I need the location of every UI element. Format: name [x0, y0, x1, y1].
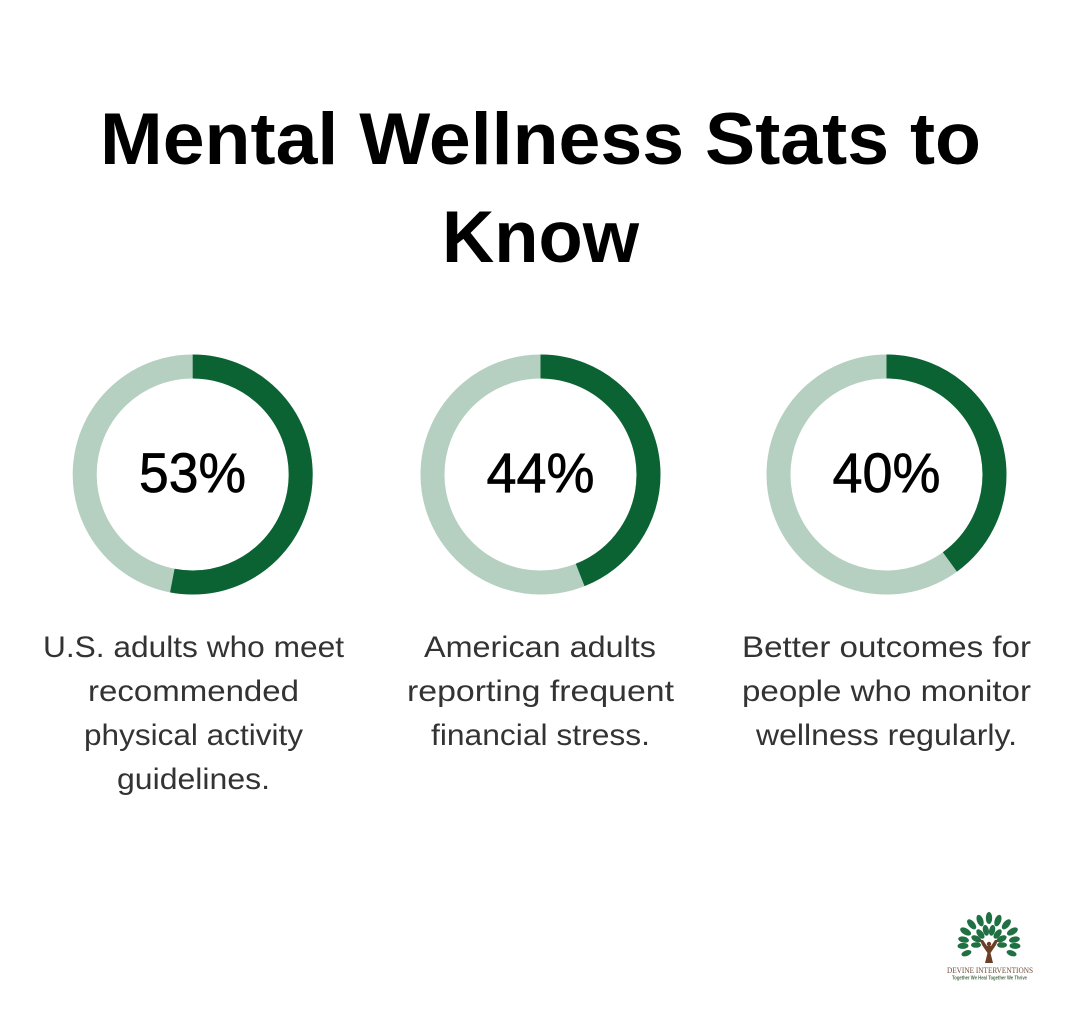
description: financial stress: American adults: [424, 631, 656, 664]
description: wellness monitoring: [742, 631, 1031, 752]
description: physical activity: guidelines.: [117, 763, 270, 796]
description: physical activity: [43, 631, 345, 796]
description: financial stress: reporting frequent: [407, 675, 675, 708]
description: financial stress: financial stress.: [431, 719, 650, 752]
title: Know: [442, 197, 639, 278]
description: wellness monitoring: wellness regularly.: [755, 719, 1017, 752]
title: Mental Wellness Stats to: [100, 99, 981, 180]
value: 53%: 53%: [139, 441, 246, 504]
panel: 40% stat: [742, 366, 1031, 752]
description: physical activity: physical activity: [84, 719, 303, 752]
donut chart: 44%: [432, 366, 648, 582]
donut chart: 53%: [85, 366, 301, 582]
icon: tree: [957, 912, 1021, 963]
title: [100, 99, 981, 278]
description: physical activity: U.S. adults who meet: [43, 631, 345, 664]
description: financial stress: [407, 631, 675, 752]
value: 44%: 44%: [486, 441, 594, 504]
value: 40%: 40%: [832, 441, 940, 504]
logo name: DEVINE INTERVENTIONS: [947, 966, 1033, 975]
description: wellness monitoring: people who monitor: [742, 675, 1031, 708]
description: physical activity: recommended: [88, 675, 299, 708]
logo: Devine Interventions: [947, 912, 1033, 982]
logo tagline: Together We Heal Together We Thrive: [952, 976, 1027, 982]
description: wellness monitoring: Better outcomes for: [742, 631, 1031, 664]
panel: 44% stat: [407, 366, 675, 752]
donut chart: 40%: [778, 366, 994, 582]
panel: 53% stat: [43, 366, 345, 796]
